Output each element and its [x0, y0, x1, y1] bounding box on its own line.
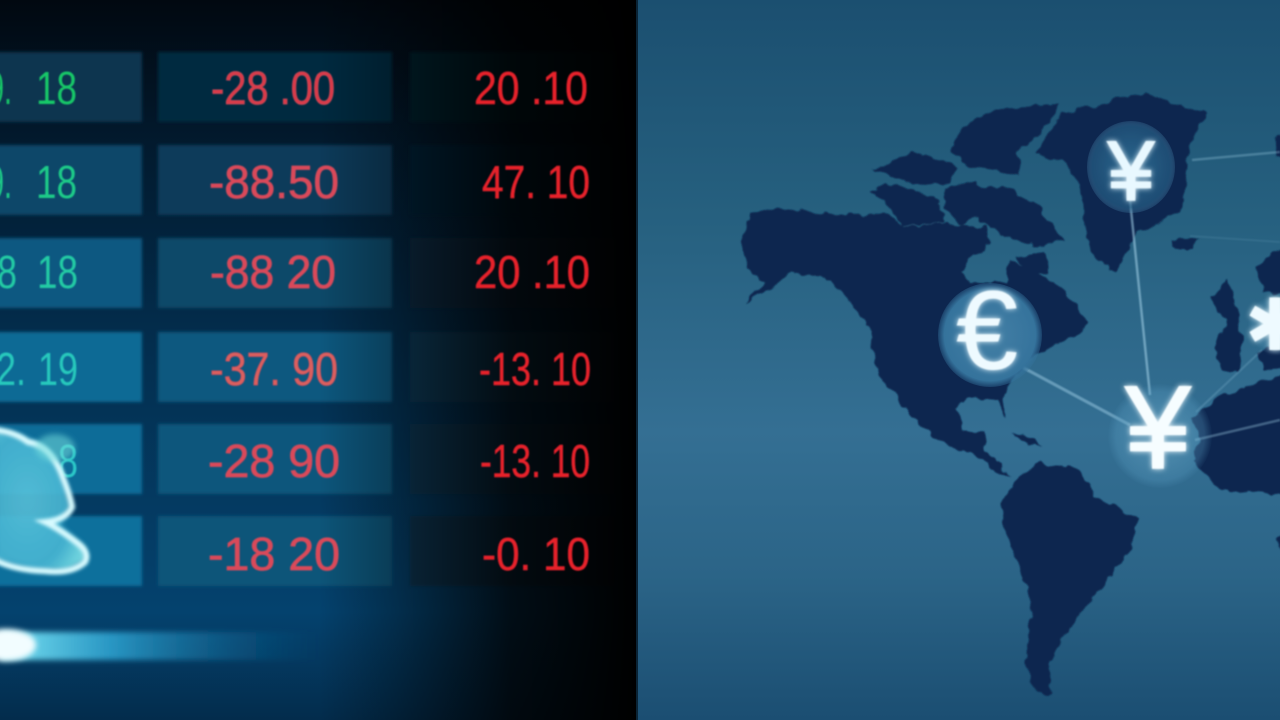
- map: cuba: [1011, 433, 1041, 445]
- map: central arctic island: [944, 180, 985, 225]
- icon: yen symbol lower bubble: ¥: [1124, 362, 1191, 494]
- green rate numbers: 18: [36, 156, 77, 208]
- rate column 3 tiles: [410, 52, 615, 586]
- green rate numbers: 18: [37, 246, 78, 298]
- map: ellesmere island: [950, 106, 1060, 175]
- map: africa: [1193, 372, 1280, 495]
- map: land masses: [741, 93, 1280, 695]
- right side fade: [0, 0, 638, 720]
- red change numbers: -18 20: [208, 528, 340, 580]
- red change numbers: [208, 62, 340, 580]
- panel: trading board: [0, 0, 638, 720]
- green rate numbers: [0, 62, 78, 487]
- map: victoria island: [870, 183, 945, 226]
- network lines: [1022, 152, 1280, 440]
- map: british isles: [1211, 280, 1242, 373]
- icon: euro symbol bubble: €: [956, 268, 1018, 393]
- green rate numbers: 8: [58, 435, 78, 487]
- red value numbers: [474, 62, 591, 580]
- map: banks island: [874, 152, 958, 184]
- icon: euro symbol bubble: [938, 268, 1042, 393]
- rate column 2 tiles: [158, 52, 392, 586]
- red value numbers: -0. 10: [482, 528, 590, 580]
- red change numbers: -88 20: [210, 246, 336, 298]
- map: madagascar edge: [1276, 530, 1280, 570]
- map: scandinavia: [1256, 245, 1280, 294]
- map: north america: [741, 208, 1088, 477]
- icon: yen symbol lower bubble: [1108, 362, 1212, 494]
- green rate numbers: 18: [36, 62, 77, 114]
- red value numbers: -13. 10: [479, 343, 591, 395]
- map: labrador island: [1016, 250, 1050, 274]
- rate column 1 tiles: [0, 52, 142, 586]
- panel divider: [636, 0, 638, 720]
- green rate numbers: 19: [38, 343, 78, 395]
- red value numbers: 20 .10: [474, 62, 588, 114]
- icon: yen symbol top bubble: ¥: [1107, 124, 1155, 218]
- panel: world map: [638, 0, 1280, 720]
- map: greenland: [1034, 93, 1206, 272]
- icon: yen symbol top bubble: [1087, 121, 1175, 218]
- red change numbers: -28 90: [208, 435, 340, 487]
- red change numbers: -28 .00: [211, 62, 335, 114]
- red value numbers: 47. 10: [482, 156, 590, 208]
- map: top right land: [1274, 130, 1280, 160]
- glowing globe icon: [0, 430, 87, 572]
- map: south america: [1003, 463, 1140, 695]
- red value numbers: 20 .10: [474, 246, 590, 298]
- red value numbers: -13. 10: [480, 435, 590, 487]
- red change numbers: -88.50: [209, 156, 339, 208]
- map: baffin island: [970, 185, 1064, 246]
- map: iceland: [1172, 238, 1200, 250]
- map: europe: [1258, 340, 1280, 371]
- light streak: [0, 629, 320, 661]
- red change numbers: -37. 90: [210, 343, 338, 395]
